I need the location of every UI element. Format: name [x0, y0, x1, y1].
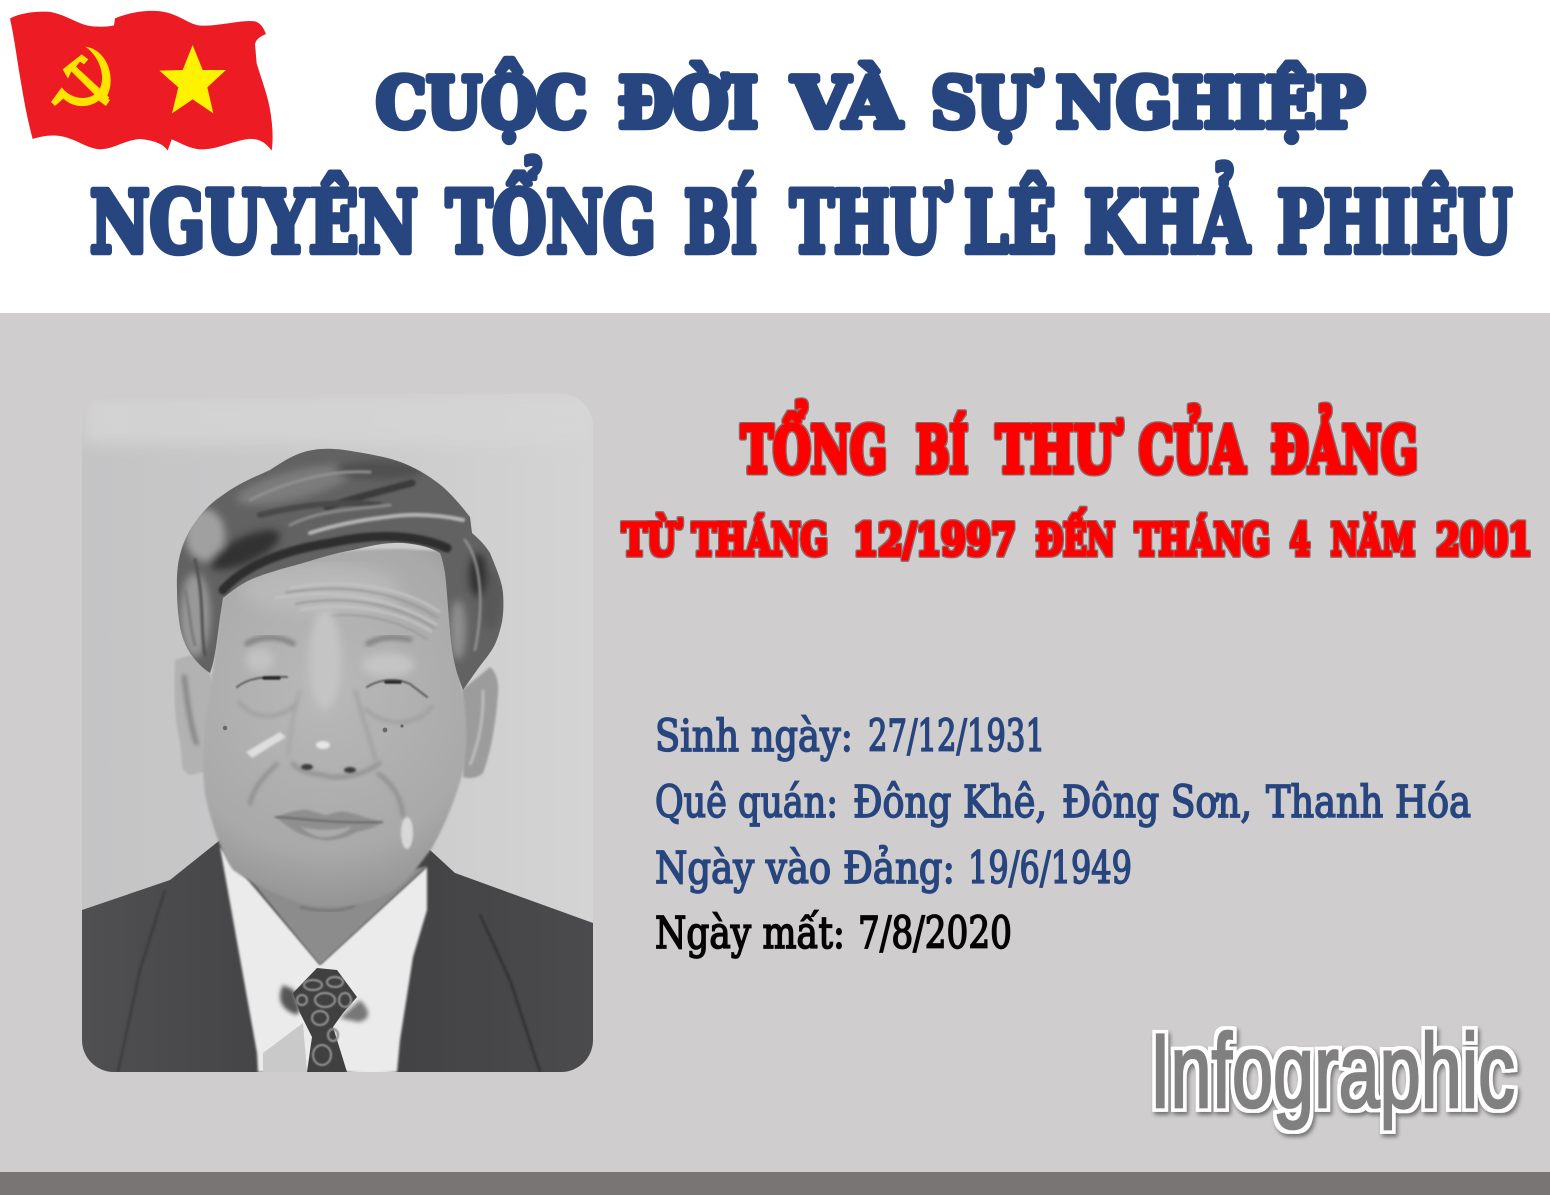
icon: hammer and sickle [51, 47, 111, 106]
nose [292, 762, 381, 777]
neck [226, 850, 427, 965]
title line 2: LÊ [964, 173, 1056, 273]
heading line 1: THƯ [996, 413, 1123, 488]
home town [655, 777, 1471, 828]
title line 1 [376, 59, 1365, 144]
title line 1: SỰ [931, 63, 1043, 144]
shirt [220, 847, 427, 1072]
heading line 2: term dates: 4 [1290, 515, 1310, 566]
birth date: 27/12/1931 [868, 711, 1045, 762]
mouth [275, 810, 383, 840]
home town: Đông Sơn, [1062, 777, 1252, 828]
heading line 2: term dates: THÁNG [1135, 513, 1270, 566]
wrinkles around eyes and nose [238, 690, 433, 817]
birth date [655, 711, 1045, 762]
main grey panel [0, 313, 1550, 1173]
forehead highlights and wrinkles [240, 565, 440, 640]
white notch under the photo [348, 1070, 396, 1072]
suit [82, 840, 593, 1072]
title line 2 [90, 157, 1512, 273]
title line 2: THƯ [790, 173, 952, 273]
heading line 1: CỦA [1139, 405, 1246, 488]
photo background [82, 440, 220, 910]
header background [0, 0, 1550, 313]
face [203, 549, 466, 907]
home town: Thanh Hóa [1266, 777, 1471, 828]
chin shadow [300, 906, 355, 911]
left ear [174, 655, 212, 775]
moles [223, 724, 404, 732]
heading line 2: term dates: ĐẾN [1036, 507, 1115, 566]
title line 2: TỔNG [446, 157, 656, 273]
title line 2: KHẢ [1084, 163, 1250, 273]
heading line 2: term dates: 12/1997 [853, 515, 1016, 566]
icon: yellow star [159, 45, 226, 113]
title [90, 59, 1512, 273]
birth date: Sinh ngày: [655, 711, 853, 762]
title line 1: ĐỜI [618, 62, 758, 144]
heading line 1 [741, 401, 1418, 488]
right ear [462, 667, 498, 778]
home town: Đông Khê, [853, 777, 1047, 828]
title line 2: BÍ [684, 173, 757, 273]
heading line 2: term dates [622, 507, 1532, 566]
heading line 2: term dates: NĂM [1331, 513, 1415, 566]
bottom band [0, 1172, 1550, 1195]
title line 1: CUỘC [376, 59, 587, 144]
eyebrows [245, 637, 412, 645]
party join date: Ngày vào Đảng: [655, 843, 955, 894]
heading line 1: ĐẢNG [1271, 405, 1418, 488]
title line 2: NGUYÊN [90, 173, 418, 273]
heading line 1: BÍ [916, 413, 968, 488]
date of death: 7/8/2020 [858, 908, 1012, 959]
heading: general secretary [622, 401, 1532, 566]
title line 1: NGHIỆP [1056, 63, 1365, 144]
date of death: Ngày mất: [655, 908, 845, 959]
eyes [237, 677, 427, 697]
face highlights [246, 610, 414, 710]
heading line 2: term dates: TỪ [622, 513, 683, 566]
party join date: 19/6/1949 [968, 843, 1132, 894]
necktie [280, 968, 368, 1072]
skin shine [246, 732, 413, 849]
heading line 2: term dates: THÁNG [692, 513, 828, 566]
biography details [655, 711, 1471, 959]
heading line 1: TỔNG [741, 401, 887, 488]
home town: Quê quán: [655, 777, 838, 828]
hair [176, 448, 504, 690]
portrait photo [82, 394, 593, 1078]
date of death [655, 908, 1012, 959]
icon: party flag with hammer, sickle and star [10, 11, 273, 151]
shirt shadow below collar [263, 1023, 307, 1072]
title line 1: VÀ [791, 62, 903, 144]
